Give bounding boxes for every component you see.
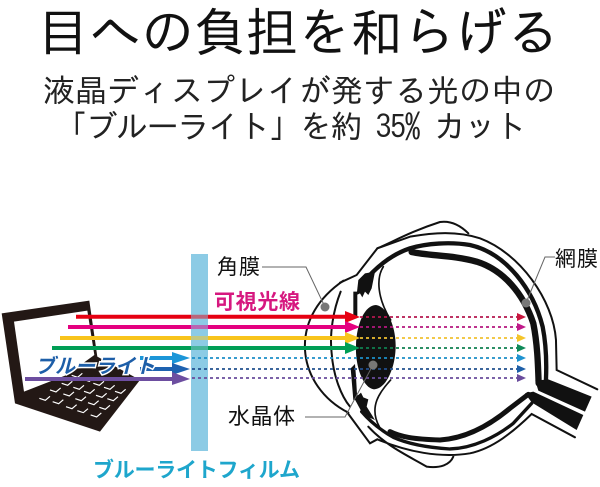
label: blue light: ブルーライト (35, 355, 155, 378)
ciliary body bottom (351, 364, 375, 420)
cornea inner curve (331, 292, 350, 407)
label: blue light film: ブルーライトフィルム (93, 458, 300, 482)
optic nerve (525, 379, 592, 430)
label: crystalline lens: 水晶体 (228, 404, 295, 429)
film: blue light filter (191, 254, 208, 451)
retina top (412, 252, 539, 383)
label: visible light: 可視光線 (214, 291, 300, 314)
subtitle text block: 液晶ディスプレイが発する光の中の (43, 74, 555, 106)
label: cornea: 角膜 (217, 256, 260, 279)
title: 目への負担を和らげる (37, 6, 559, 58)
solid arrows: visible light (52, 311, 360, 354)
film overlay on arrows (191, 312, 208, 352)
icon: laptop (2, 301, 140, 432)
blue light arrows (25, 352, 190, 385)
leader lines and dots (262, 257, 555, 417)
subtitle text block (43, 74, 555, 142)
choroid bottom band (362, 403, 532, 449)
retina bottom (390, 394, 528, 440)
label: retina: 網膜 (555, 248, 598, 271)
sclera outer outline top (340, 233, 597, 389)
dotted arrows through the eye (192, 317, 518, 378)
small arrowheads (517, 313, 526, 382)
eye diagram (305, 222, 597, 467)
eyelid fold top (377, 222, 468, 248)
choroid band top (362, 243, 546, 379)
crystalline lens (356, 305, 396, 389)
lens capsule (375, 267, 391, 427)
subtitle text block: 「ブルーライト」を約 35% カット (55, 110, 527, 142)
ciliary body top (353, 272, 375, 317)
sclera lower outline (347, 412, 575, 467)
cornea (305, 281, 348, 413)
